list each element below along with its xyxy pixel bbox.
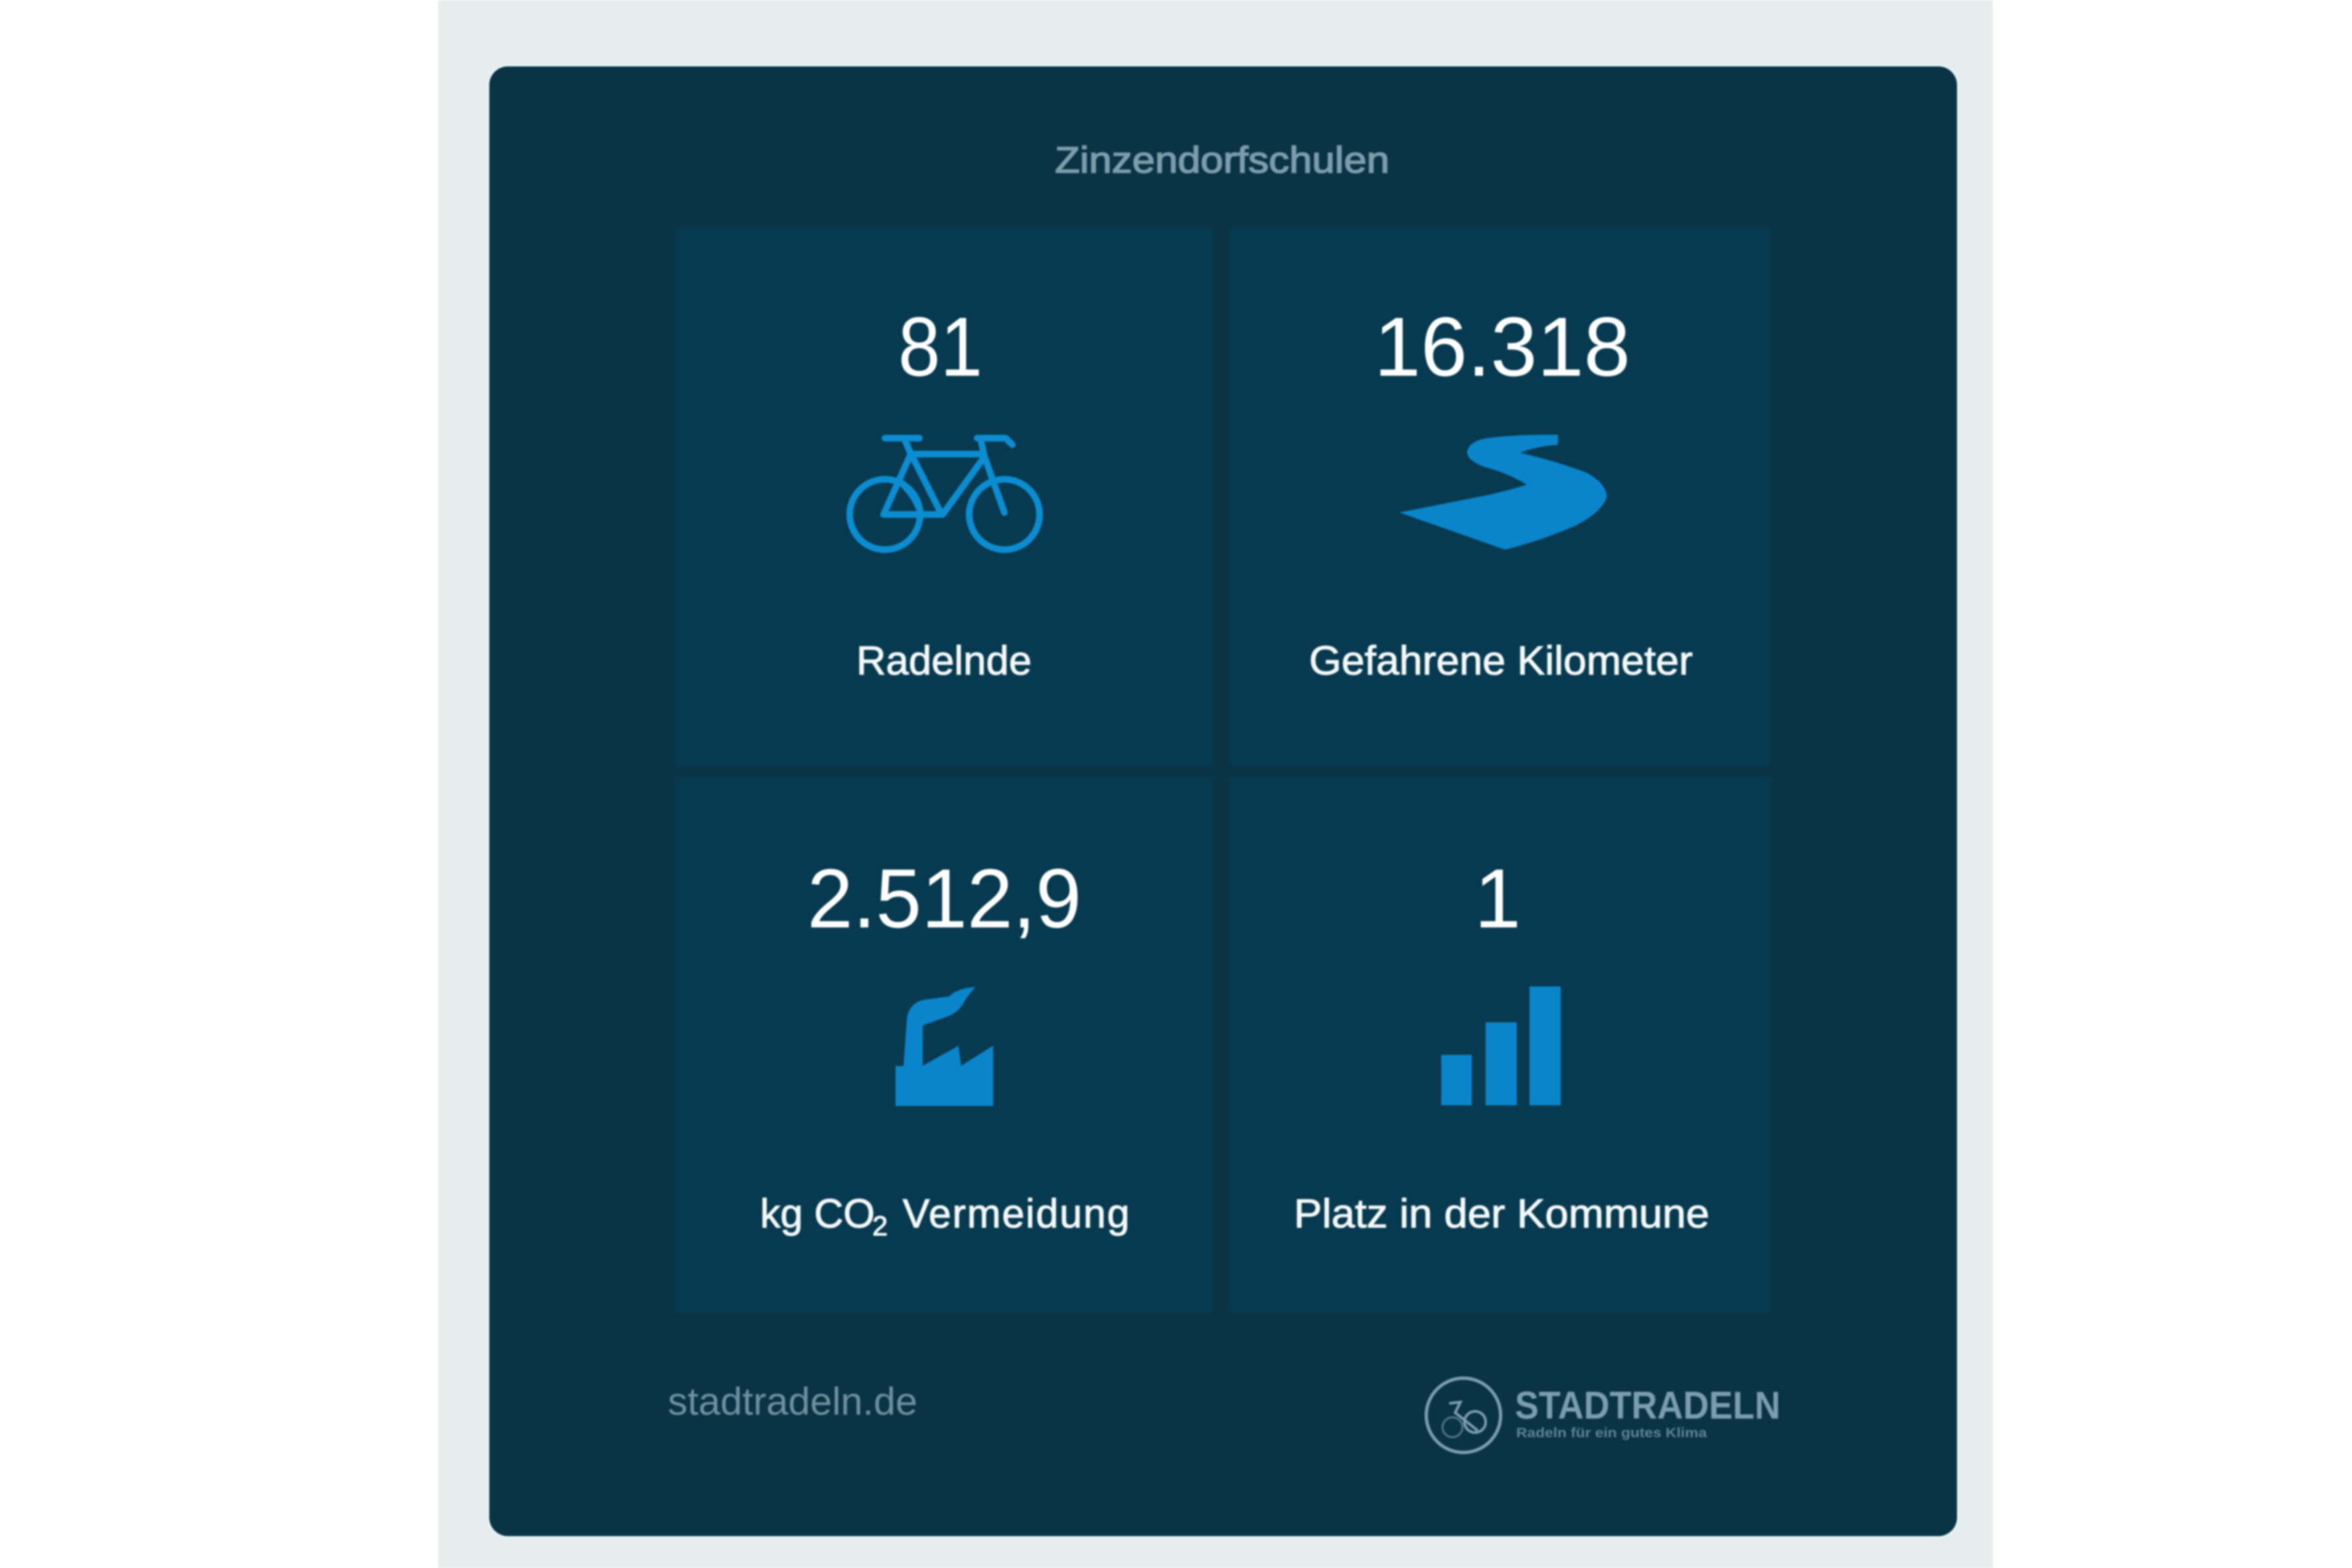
label: Radelnde: Radelnde [856, 638, 1032, 683]
logo: STADTRADELN [1426, 1378, 1780, 1452]
panel: Gefahrene Kilometer [1230, 228, 1770, 766]
panel: Platz in der Kommune [1230, 777, 1770, 1312]
icon: bar chart [1441, 986, 1561, 1105]
label: kg CO2 Vermeidung: Vermeidung [890, 1191, 1131, 1236]
page background band [438, 0, 1993, 1568]
logo wordmark: STADTRADELN [1515, 1384, 1780, 1427]
footer link text: stadtradeln.de [668, 1380, 917, 1423]
label: kg CO2 Vermeidung: kg CO [760, 1191, 875, 1236]
panel: kg CO2 Vermeidung [675, 777, 1212, 1312]
value: 1: 1 [1474, 852, 1521, 945]
value: 2.512,9: 2.512,9 [807, 852, 1081, 945]
title: Zinzendorfschulen [1055, 139, 1389, 181]
card panel [487, 64, 1959, 1538]
icon: factory [896, 988, 992, 1105]
label: Gefahrene Kilometer: Gefahrene Kilometer [1309, 638, 1693, 683]
label: kg CO2 Vermeidung: 2 [872, 1210, 888, 1241]
value: 81: 81 [898, 300, 982, 394]
logo tagline: Radeln für ein gutes Klima [1516, 1426, 1707, 1441]
icon: logo circle with cyclist [1426, 1378, 1500, 1452]
icon: bicycle [850, 438, 1040, 550]
icon: winding road [1399, 435, 1607, 550]
panel: Radelnde [675, 228, 1212, 766]
label: Platz in der Kommune: Platz in der Kommune [1294, 1191, 1709, 1236]
value: 16.318: 16.318 [1374, 300, 1630, 394]
